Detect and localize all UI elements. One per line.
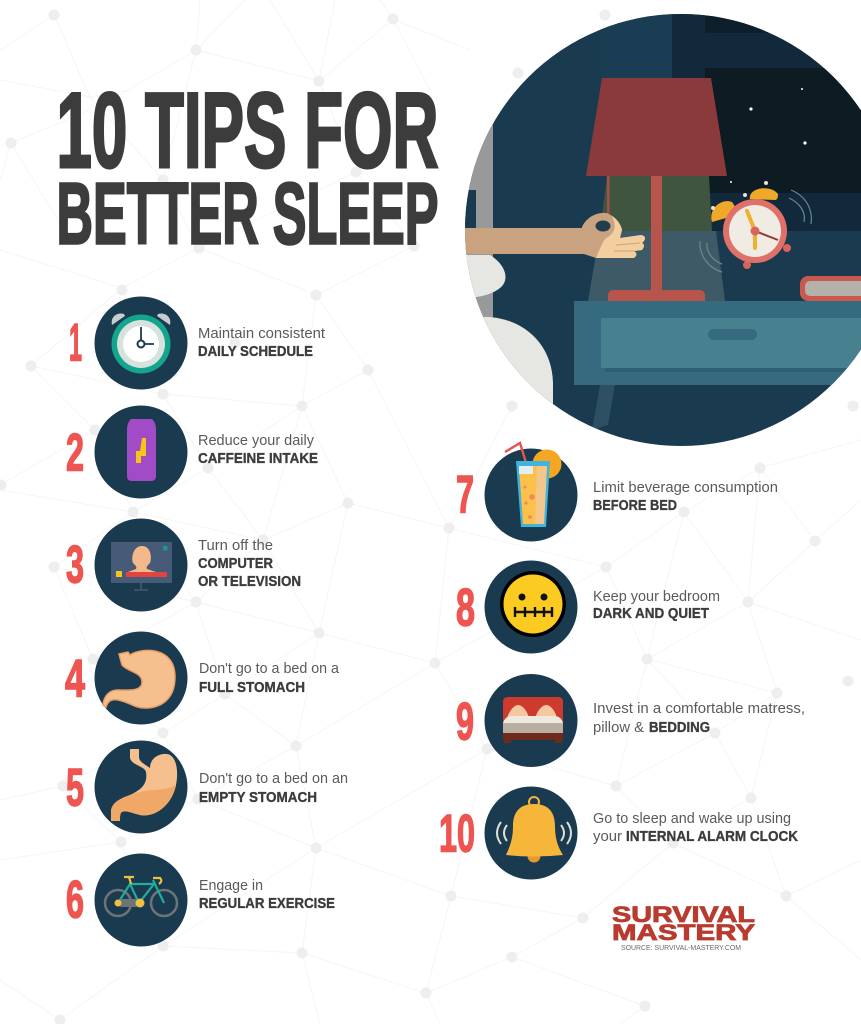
number 4: 4 [65,650,85,708]
curtain [465,125,493,320]
title: 10 TIPS FOR [56,70,438,190]
number 10: 10 [439,804,475,864]
text: Turn off the [198,538,273,554]
number 6: 6 [66,870,84,930]
lamp shade [586,78,727,176]
text: EMPTY STOMACH [199,790,317,806]
ringing alarm clock [711,181,791,269]
icon: television [94,518,188,612]
text: Maintain consistent [198,326,325,342]
nightstand light beam [592,385,615,430]
logo: Survival Mastery: SURVIVAL [612,902,755,927]
number 7: 7 [456,466,474,524]
tip 3 [66,518,301,612]
text [198,538,301,590]
text: Limit beverage consumption [593,480,778,496]
tip 6 [66,854,335,946]
text: COMPUTER [198,556,273,572]
icon: full stomach [94,632,188,724]
icon: juice glass [484,443,578,542]
title [56,70,438,262]
text [199,878,335,912]
number 2: 2 [66,424,84,482]
duvet [484,317,553,404]
arm [460,228,585,254]
text: BEDDING [649,720,710,736]
text: Reduce your daily [198,433,315,449]
text: pillow & [593,720,644,736]
tip 9 [456,674,805,767]
tip 4 [65,632,340,724]
icon: bed [484,674,578,767]
pillow [466,255,506,297]
logo: Survival Mastery: MASTERY [612,920,755,945]
text: your [593,829,622,845]
text [593,589,720,622]
icon: ringing bell [484,786,578,880]
pull cord [607,176,610,214]
number 5: 5 [66,758,84,818]
text [199,771,348,806]
illustration: bedside lamp and alarm clock [460,10,861,450]
text: CAFFEINE INTAKE [198,451,318,467]
text: INTERNAL ALARM CLOCK [626,829,798,845]
logo: Survival Mastery: SOURCE: SURVIVAL-MASTERY.COM [621,943,741,952]
stars [730,88,807,183]
text: BEFORE BED [593,498,677,514]
lamp light cone [588,231,725,301]
tip 5 [66,740,348,834]
text: Don't go to a bed on a [199,661,340,677]
text: DAILY SCHEDULE [198,344,313,360]
text [593,480,778,514]
text: DARK AND QUIET [593,606,709,622]
text: REGULAR EXERCISE [199,896,335,912]
text: OR TELEVISION [198,574,301,590]
number 8: 8 [456,578,475,638]
tip 10 [439,786,798,880]
tip 1: 1 [69,314,82,372]
text: Engage in [199,878,263,894]
icon: bicycle [94,854,188,946]
text: Go to sleep and wake up using [593,811,791,827]
tip 2 [66,406,318,498]
lamp stem and base [608,176,705,301]
vibration marks [700,190,811,272]
number 9: 9 [456,692,474,752]
nightstand [574,301,861,385]
icon: alarm clock [94,296,188,390]
tip 8 [456,560,720,654]
tip 7 [456,443,778,542]
text [593,811,798,845]
number 3: 3 [66,536,84,594]
logo: Survival Mastery [612,902,755,952]
tip 1 [69,296,325,390]
text: Keep your bedroom [593,589,720,605]
text: Don't go to a bed on an [199,771,348,787]
text [199,661,340,696]
title: BETTER SLEEP [56,166,438,262]
text: Invest in a comfortable matress, [593,701,805,717]
icon: zipped-mouth face [484,560,578,654]
icon: empty stomach [94,740,188,834]
text: FULL STOMACH [199,680,305,696]
icon: energy drink can [94,406,188,498]
text [593,701,805,736]
text [198,326,325,360]
text [198,433,318,467]
book [800,276,861,301]
hand [581,213,645,258]
